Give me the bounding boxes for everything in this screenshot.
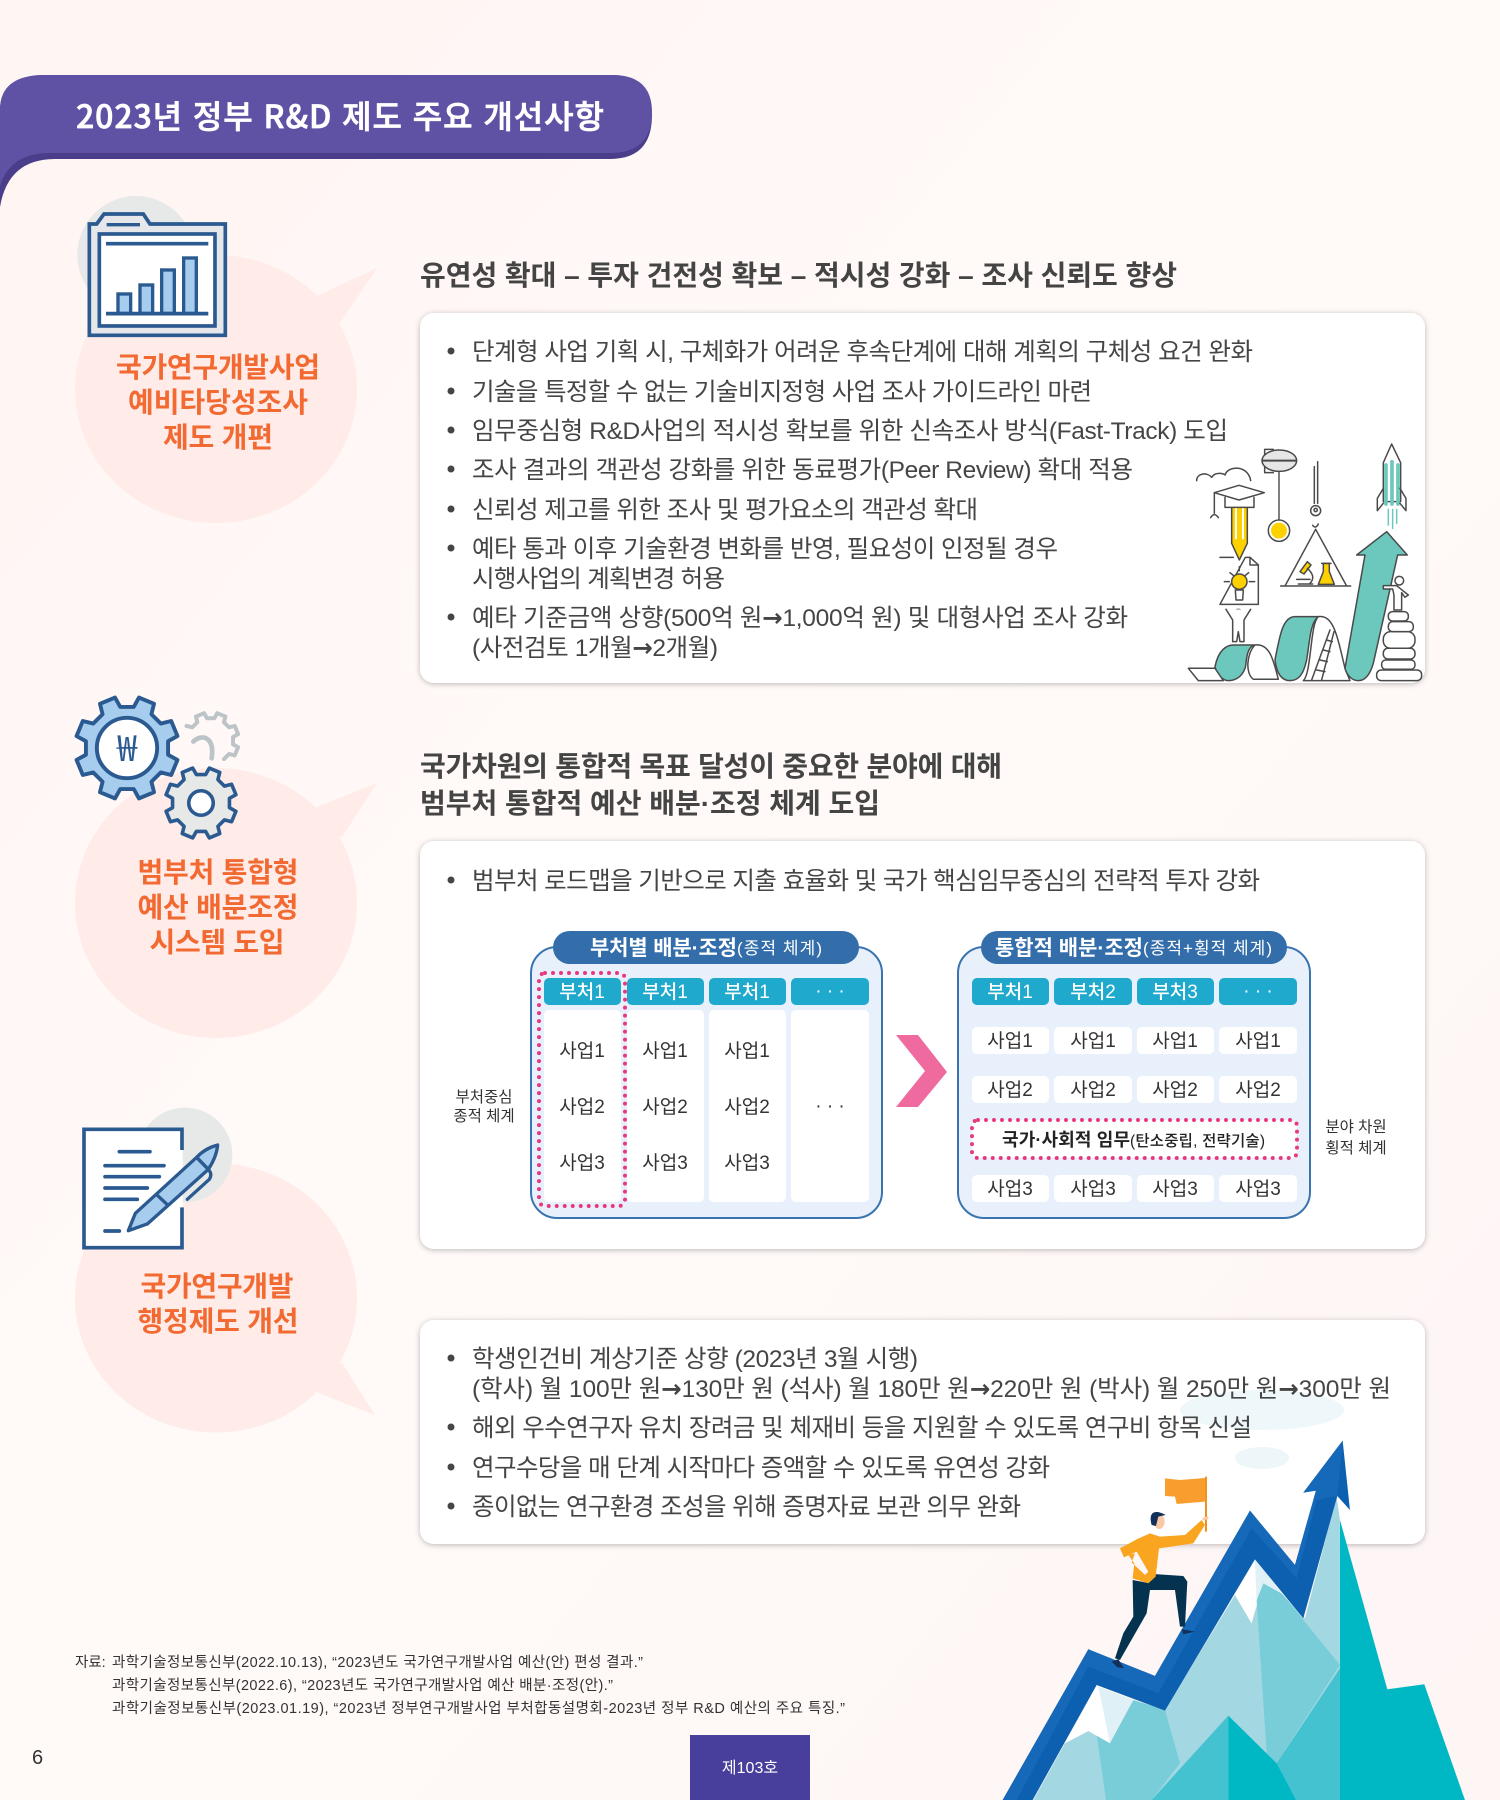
panel: 행정제도 개선: (학사) 월 100만 원→130만 원 (석사) 월 180만 원→220만 원 (박사) 월 250만 원→300만 원	[472, 1374, 1391, 1403]
icon: folder with bar chart	[77, 196, 225, 335]
panel: 예타 제도 개편: 기술을 특정할 수 없는 기술비지정형 사업 조사 가이드라인 마련	[472, 378, 1092, 406]
diagram: 통합적 배분·조정: 사업2	[1235, 1079, 1281, 1101]
title banner: 2023년 정부 R&D 제도 주요 개선사항	[76, 92, 604, 138]
icon: gears with won sign	[77, 698, 238, 838]
source notes: 자료:	[75, 1654, 106, 1671]
label: 부처중심 종적 체계	[453, 1088, 515, 1125]
diagram: 부처별 배분·조정: 사업1	[724, 1040, 770, 1062]
panel: 예타 제도 개편	[420, 313, 1425, 683]
title banner	[0, 75, 652, 207]
diagram: 통합적 배분·조정: 사업2	[1152, 1079, 1198, 1101]
diagram: 부처별 배분·조정: 사업2	[559, 1096, 605, 1118]
panel: 예타 제도 개편: 시행사업의 계획변경 허용	[472, 565, 725, 593]
label: 범부처 통합형 예산 배분조정 시스템 도입	[138, 857, 298, 958]
diagram: 부처별 배분·조정: 부처1	[724, 981, 770, 1003]
panel: 예타 제도 개편: 조사 결과의 객관성 강화를 위한 동료평가(Peer Review) 확대 적용	[472, 456, 1133, 484]
diagram: 통합적 배분·조정: 사업3	[1235, 1178, 1281, 1200]
diagram: 통합적 배분·조정: 통합적 배분·조정	[995, 937, 1143, 960]
diagram: 통합적 배분·조정: · · ·	[1243, 981, 1273, 1002]
diagram: 부처별 배분·조정: 사업1	[642, 1040, 688, 1062]
speech bubble: 예산 배분조정	[75, 768, 377, 1038]
label: 국가연구개발 행정제도 개선	[138, 1271, 298, 1337]
page number: 6	[32, 1747, 43, 1769]
panel: 행정제도 개선: 학생인건비 계상기준 상향 (2023년 3월 시행)	[472, 1345, 918, 1373]
diagram: 통합적 배분·조정: 사업3	[987, 1178, 1033, 1200]
icon: document and pen	[83, 1108, 232, 1248]
diagram: 부처별 배분·조정: 부처별 배분·조정	[590, 937, 737, 960]
diagram: 부처별 배분·조정	[531, 931, 882, 1218]
label: 범부처 통합형 예산 배분조정 시스템 도입: 예산 배분조정	[138, 892, 298, 923]
diagram: 부처별 배분·조정: 사업2	[724, 1096, 770, 1118]
source notes	[75, 1654, 845, 1717]
diagram: 통합적 배분·조정: 부처1	[987, 981, 1033, 1003]
panel: 행정제도 개선: 연구수당을 매 단계 시작마다 증액할 수 있도록 유연성 강화	[472, 1454, 1050, 1482]
panel: 예타 제도 개편: 신뢰성 제고를 위한 조사 및 평가요소의 객관성 확대	[472, 496, 978, 524]
heading: section 2	[420, 751, 1002, 819]
source notes: 과학기술정보통신부(2022.10.13), “2023년도 국가연구개발사업 예산(안) 편성 결과.”	[112, 1654, 643, 1671]
label: 부처중심 종적 체계: 종적 체계	[453, 1107, 515, 1125]
heading: section 2: 범부처 통합적 예산 배분·조정 체계 도입	[420, 788, 880, 819]
heading: section 1: 유연성 확대 – 투자 건전성 확보 – 적시성 강화 – 조사 신뢰도 향상	[420, 260, 1177, 291]
label: 범부처 통합형 예산 배분조정 시스템 도입: 범부처 통합형	[138, 857, 298, 888]
panel: 행정제도 개선: 종이없는 연구환경 조성을 위해 증명자료 보관 의무 완화	[472, 1493, 1021, 1521]
diagram: 부처별 배분·조정: 사업3	[642, 1152, 688, 1174]
diagram: 통합적 배분·조정: 사업2	[987, 1079, 1033, 1101]
arrow: pink chevron	[896, 1035, 947, 1107]
diagram: 통합적 배분·조정: 사업1	[1070, 1030, 1116, 1052]
label: 국가연구개발 행정제도 개선: 행정제도 개선	[138, 1306, 298, 1337]
panel: 예타 제도 개편: 예타 기준금액 상향(500억 원→1,000억 원) 및 대형사업 조사 강화	[472, 603, 1128, 632]
label: 분야 차원 횡적 체계	[1325, 1118, 1387, 1157]
illustration: mountain climber with rising arrow	[1003, 1441, 1465, 1800]
label: 국가연구개발사업 예비타당성조사 제도 개편: 제도 개편	[163, 422, 273, 453]
diagram: 통합적 배분·조정	[958, 931, 1310, 1218]
panel: 범부처 통합: 범부처 로드맵을 기반으로 지출 효율화 및 국가 핵심임무중심의 전략적 투자 강화	[472, 867, 1260, 895]
heading: section 2: 국가차원의 통합적 목표 달성이 중요한 분야에 대해	[420, 751, 1002, 782]
diagram: 부처별 배분·조정: 부처1	[642, 981, 688, 1003]
diagram: 통합적 배분·조정: 사업2	[1070, 1079, 1116, 1101]
panel: 행정제도 개선	[420, 1320, 1425, 1544]
label: 국가연구개발사업 예비타당성조사 제도 개편	[116, 352, 320, 453]
issue tab	[690, 1735, 810, 1800]
diagram: 통합적 배분·조정: (종적+횡적 체계)	[1143, 939, 1272, 958]
diagram: 부처별 배분·조정: 부처1	[559, 981, 605, 1003]
diagram: 통합적 배분·조정: 사업1	[1235, 1030, 1281, 1052]
label: 국가연구개발사업 예비타당성조사 제도 개편: 국가연구개발사업	[116, 352, 320, 383]
label: 국가연구개발 행정제도 개선: 국가연구개발	[140, 1271, 294, 1302]
panel: 예타 제도 개편: 임무중심형 R&D사업의 적시성 확보를 위한 신속조사 방식(Fast-Track) 도입	[472, 417, 1228, 445]
diagram: 부처별 배분·조정: 사업2	[642, 1096, 688, 1118]
diagram: 부처별 배분·조정: 사업3	[724, 1152, 770, 1174]
diagram: 부처별 배분·조정: · · ·	[815, 1096, 845, 1117]
speech bubble: 행정제도	[75, 1164, 375, 1432]
panel: 예타 제도 개편: 예타 통과 이후 기술환경 변화를 반영, 필요성이 인정될 경우	[472, 535, 1058, 563]
label: 부처중심 종적 체계: 부처중심	[455, 1088, 513, 1106]
diagram: 부처별 배분·조정: · · ·	[815, 981, 845, 1002]
diagram: 부처별 배분·조정: (종적 체계)	[737, 939, 822, 958]
diagram: 통합적 배분·조정: 사업1	[987, 1030, 1033, 1052]
diagram: 통합적 배분·조정: 국가·사회적 임무	[1002, 1130, 1130, 1150]
panel: 범부처 통합	[420, 841, 1425, 1249]
label: 분야 차원 횡적 체계: 분야 차원	[1325, 1118, 1387, 1136]
label: 분야 차원 횡적 체계: 횡적 체계	[1325, 1139, 1387, 1157]
label: 국가연구개발사업 예비타당성조사 제도 개편: 예비타당성조사	[128, 387, 308, 418]
source notes: 과학기술정보통신부(2022.6), “2023년도 국가연구개발사업 예산 배분·조정(안).”	[112, 1677, 613, 1694]
panel: 행정제도 개선: 해외 우수연구자 유치 장려금 및 체재비 등을 지원할 수 있도록 연구비 항목 신설	[472, 1414, 1252, 1442]
label: 범부처 통합형 예산 배분조정 시스템 도입: 시스템 도입	[150, 927, 284, 958]
panel: 예타 제도 개편: (사전검토 1개월→2개월)	[472, 633, 718, 662]
diagram: 부처별 배분·조정: 사업1	[559, 1040, 605, 1062]
clouds	[1180, 1390, 1344, 1469]
diagram: 통합적 배분·조정: 부처3	[1152, 981, 1198, 1003]
source notes: 과학기술정보통신부(2023.01.19), “2023년 정부연구개발사업 부처합동설명회-2023년 정부 R&D 예산의 주요 특징.”	[112, 1700, 845, 1717]
panel: 예타 제도 개편: 단계형 사업 기획 시, 구체화가 어려운 후속단계에 대해 계획의 구체성 요건 완화	[472, 338, 1253, 366]
issue tab: 제103호	[722, 1759, 778, 1777]
diagram: 통합적 배분·조정: 사업1	[1152, 1030, 1198, 1052]
diagram: 부처별 배분·조정: 사업3	[559, 1152, 605, 1174]
diagram: 통합적 배분·조정: 부처2	[1070, 981, 1116, 1003]
diagram: 통합적 배분·조정: (탄소중립, 전략기술)	[1130, 1132, 1265, 1150]
diagram: 통합적 배분·조정: 사업3	[1152, 1178, 1198, 1200]
illustration: growth arrow with research icons	[1188, 444, 1422, 681]
diagram: 통합적 배분·조정: 사업3	[1070, 1178, 1116, 1200]
speech bubble: 예비타당성조사	[75, 255, 377, 523]
icon: gears with won sign: ₩	[116, 720, 138, 772]
